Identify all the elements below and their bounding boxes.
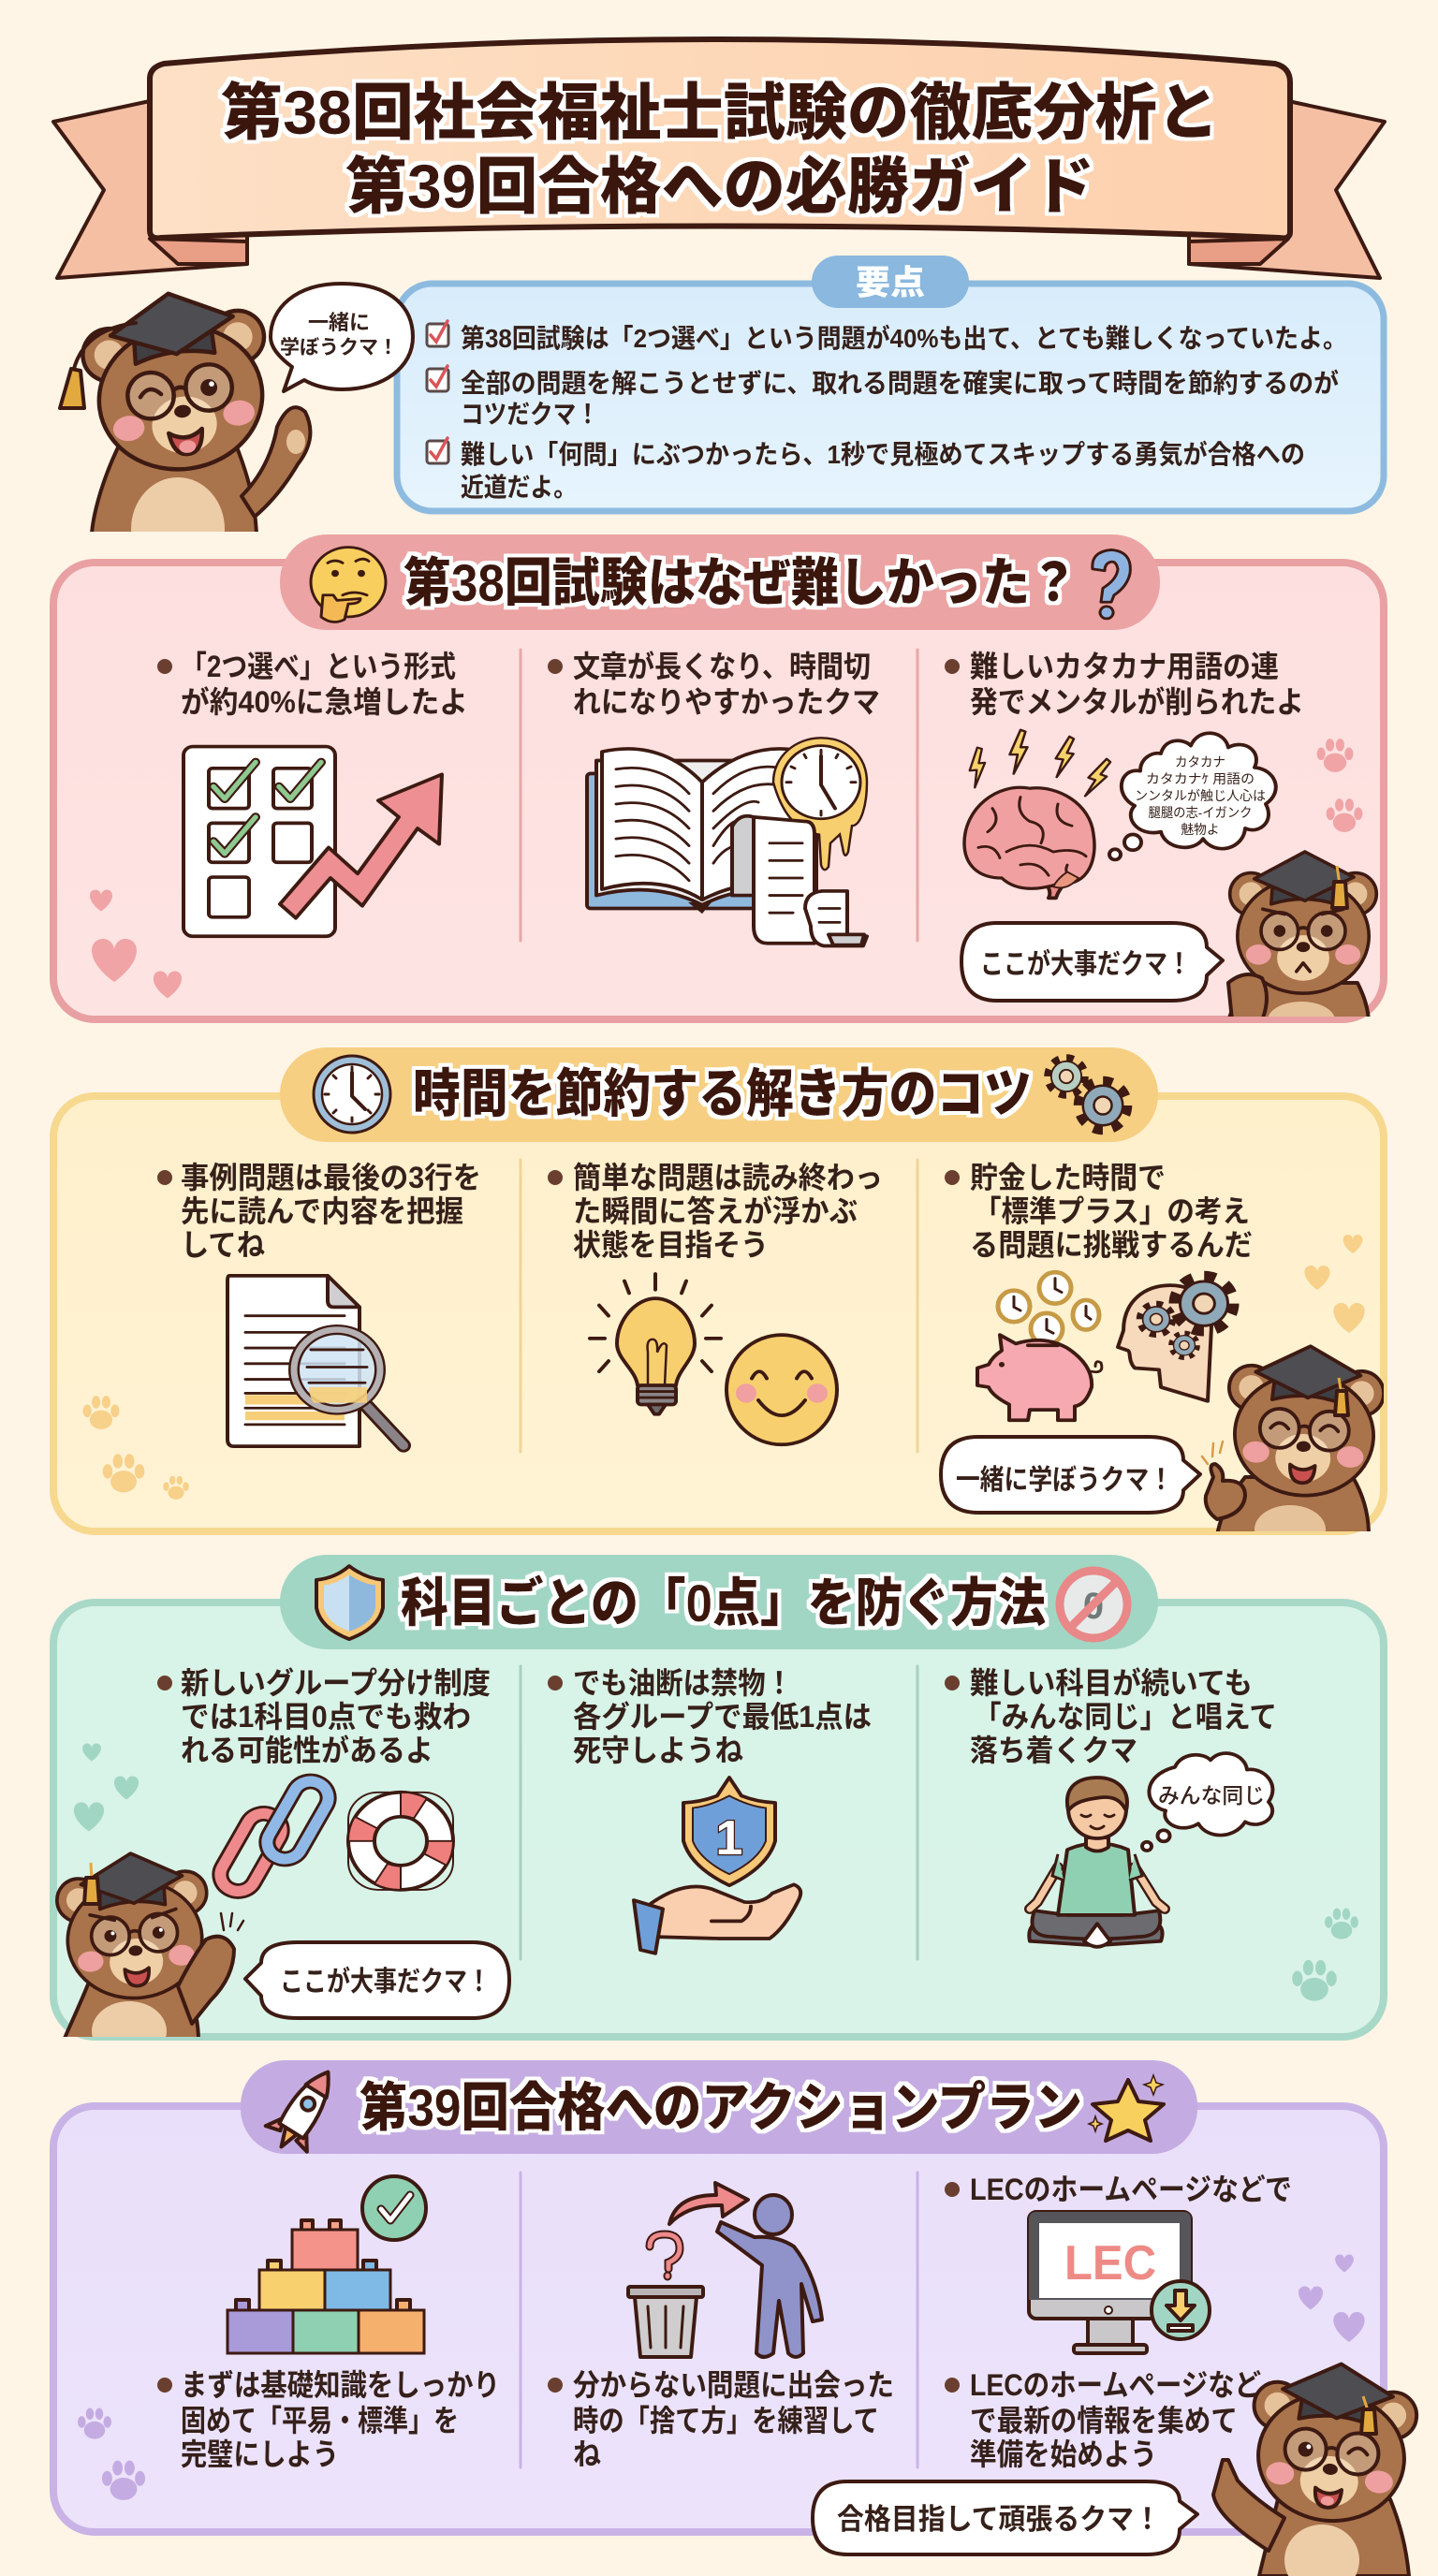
section heading: 科目ごとの「0点」を防ぐ方法 <box>401 1573 1046 1632</box>
ribbon right tail <box>1189 101 1385 278</box>
column text 2: た瞬間に答えが浮かぶ <box>573 1194 858 1228</box>
illustration: smiley face <box>726 1335 837 1444</box>
ribbon left tail <box>53 101 247 278</box>
decorative hearts <box>1304 1235 1365 1333</box>
section heading: 第38回試験はなぜ難しかった？ <box>404 553 1078 612</box>
icon: no zero sign <box>1060 1571 1127 1638</box>
decorative paws <box>78 2408 145 2500</box>
icon: thinking face <box>311 548 386 622</box>
bear mascot pointing <box>1213 2357 1420 2576</box>
column text 1: まずは基礎知識をしっかり <box>181 2368 500 2402</box>
illustration: chain links <box>214 1776 334 1897</box>
bear mascot waving with cap <box>58 292 313 532</box>
column text 2 <box>548 2368 894 2471</box>
column text 3: る問題に挑戦するんだ <box>970 1228 1253 1262</box>
decorative hearts <box>1299 2254 1365 2342</box>
decorative paws <box>83 1396 189 1500</box>
panel: time saving tips <box>53 1047 1387 1554</box>
thought cloud with katakana: カタカナｹ 用語の <box>1146 771 1255 786</box>
column text 3 <box>945 2368 1261 2471</box>
summary item 2: 全部の問題を解こうとせずに、取れる問題を確実に取って時間を節約するのが <box>461 368 1339 398</box>
column text 1: してね <box>181 1228 265 1262</box>
column text 2 <box>548 1161 883 1262</box>
speech bubble: study together <box>941 1437 1200 1513</box>
section heading: 第39回合格へのアクションプラン <box>360 2078 1082 2137</box>
column text 3: 「標準プラス」の考え <box>974 1194 1250 1228</box>
column text 2 <box>548 1666 872 1767</box>
column text 1 <box>157 650 468 719</box>
column text 2: ね <box>573 2437 601 2471</box>
bear mascot happy with thumb up <box>1204 1344 1384 1531</box>
icon: question mark <box>1093 549 1130 619</box>
icon: rocket <box>260 2059 348 2159</box>
summary item 2 <box>427 366 1339 429</box>
illustration: head with gears <box>1118 1279 1230 1401</box>
column text 2: 文章が長くなり、時間切 <box>573 650 871 683</box>
sparkle lines near paw <box>221 1913 243 1930</box>
column text 3 <box>945 650 1304 719</box>
illustration: stacked blocks with check <box>227 2176 426 2353</box>
section heading <box>280 534 1160 630</box>
thought cloud: everyone's the same: みんな同じ <box>1158 1783 1265 1808</box>
summary item 3: 難しい「何問」にぶつかったら、1秒で見極めてスキップする勇気が合格への <box>461 439 1305 469</box>
section heading <box>280 1047 1158 1142</box>
speech bubble: study together: 一緒に <box>308 311 370 334</box>
bear mascot worried <box>1228 852 1376 1039</box>
column text 2: 状態を目指そう <box>573 1228 769 1262</box>
column text 3: 貯金した時間で <box>970 1161 1166 1194</box>
speech bubble: this is important: ここが大事だクマ！ <box>280 1966 491 1998</box>
speech bubble: study together: 一緒に学ぼうクマ！ <box>956 1465 1173 1496</box>
column text 3: LECのホームページなど <box>970 2368 1261 2402</box>
speech bubble: this is important <box>245 1942 509 2018</box>
panel: why the 38th exam was hard <box>53 534 1384 1039</box>
speech bubble: study together: 学ぼうクマ！ <box>280 337 398 359</box>
column text 3: で最新の情報を集めて <box>970 2404 1238 2437</box>
column text 1: が約40%に急増したよ <box>181 685 468 719</box>
column text 2: 簡単な問題は読み終わっ <box>573 1161 883 1194</box>
column text top right: LECのホームページなどで <box>970 2173 1292 2206</box>
summary item 3: 近道だよ。 <box>461 473 577 502</box>
column text 3: 難しい科目が続いても <box>970 1666 1253 1700</box>
illustration: meditating person <box>1029 1778 1165 1947</box>
illustration: monitor with LEC and download <box>1029 2212 1210 2353</box>
illustration: monitor with LEC and download: LEC <box>1064 2236 1156 2291</box>
column text 1: 先に読んで内容を把握 <box>181 1194 463 1228</box>
ribbon main body <box>150 39 1290 238</box>
thought cloud: everyone's the same <box>1142 1753 1272 1851</box>
icon: clock <box>314 1056 390 1133</box>
speech bubble: aim to pass <box>813 2481 1197 2554</box>
column text 2: 時の「捨て方」を練習して <box>573 2404 879 2437</box>
column text 3 <box>945 1666 1277 1767</box>
decorative hearts <box>90 889 182 998</box>
decorative paws <box>1317 739 1362 832</box>
section heading <box>280 1555 1158 1649</box>
summary item 2: コツだクマ！ <box>461 400 599 429</box>
ribbon folds <box>150 239 1288 264</box>
icon: shield <box>316 1566 383 1639</box>
column text 2: 各グループで最低1点は <box>573 1700 872 1734</box>
column dividers <box>521 650 917 2467</box>
title text <box>221 78 1219 221</box>
thought cloud with katakana: ンンタルが触じ人心は <box>1135 788 1266 803</box>
thought cloud with katakana: 腿腿の志-イガンク <box>1148 805 1253 820</box>
column text 1: では1科目0点でも救わ <box>181 1700 471 1734</box>
title text: 第38回社会福祉士試験の徹底分析と <box>221 78 1219 147</box>
illustration: open book, melting clock and scroll <box>587 738 867 946</box>
column text 3: 発でメンタルが削られたよ <box>970 685 1304 719</box>
column text 1: 新しいグループ分け制度 <box>181 1666 491 1700</box>
speech bubble: this is important: ここが大事だクマ！ <box>980 948 1191 980</box>
thought cloud with katakana <box>1109 733 1276 859</box>
column text 1: れる可能性があるよ <box>181 1734 433 1767</box>
column text 1: 固めて「平易・標準」を <box>181 2404 459 2437</box>
column text 3: 難しいカタカナ用語の連 <box>970 650 1279 683</box>
thought cloud with katakana: 魅物よ <box>1181 822 1219 837</box>
column text 2 <box>548 650 880 719</box>
bear mascot waving <box>55 1852 236 2037</box>
speech bubble: this is important <box>961 923 1223 1001</box>
column text 1: 完璧にしよう <box>181 2437 339 2471</box>
summary heading pill <box>812 256 969 308</box>
column text 2: 死守しようね <box>573 1734 743 1767</box>
summary item 3 <box>427 438 1305 502</box>
column text 1: 事例問題は最後の3行を <box>181 1161 481 1194</box>
summary heading pill: 要点 <box>856 263 925 301</box>
illustration: shield number 1 and hand: 1 <box>716 1811 742 1866</box>
column text 3 <box>945 1161 1253 1262</box>
column text 2: でも油断は禁物！ <box>573 1666 793 1700</box>
panel: action plan for the 39th exam <box>53 2059 1384 2532</box>
column text 3: 落ち着くクマ <box>970 1734 1137 1767</box>
column text 3: 準備を始めよう <box>970 2437 1157 2471</box>
illustration: shield number 1 and hand <box>683 1778 775 1885</box>
section heading: 時間を節約する解き方のコツ <box>413 1064 1032 1123</box>
summary item 1: 第38回試験は「2つ選べ」という問題が40%も出て、とても難しくなっていたよ。 <box>461 323 1347 353</box>
column text 1 <box>157 1666 491 1767</box>
icon: star with sparkles <box>1089 2075 1164 2141</box>
decorative paws <box>1292 1908 1358 2001</box>
panel: preventing zero points <box>53 1555 1384 2061</box>
column text 2: れになりやすかったクマ <box>573 685 880 719</box>
icon: gears <box>1049 1060 1125 1128</box>
icon: no zero sign: 0 <box>1083 1586 1104 1627</box>
illustration: light bulb <box>590 1274 721 1414</box>
illustration: checklist and rising arrow <box>183 747 442 936</box>
thought cloud with katakana: カタカナ <box>1175 754 1225 769</box>
title ribbon banner <box>53 39 1385 278</box>
decorative hearts <box>74 1743 139 1831</box>
speech bubble: aim to pass: 合格目指して頑張るクマ！ <box>837 2503 1161 2536</box>
illustration: discard question to trash <box>628 2183 822 2357</box>
illustration: piggy bank with clock coins <box>977 1272 1102 1420</box>
section heading <box>241 2060 1197 2154</box>
column text 1 <box>157 2368 500 2471</box>
speech bubble: study together <box>271 284 413 391</box>
column text 2: 分からない問題に出会った <box>573 2368 894 2402</box>
column text 3: 「みんな同じ」と唱えて <box>974 1700 1277 1734</box>
illustration: open hand <box>634 1884 800 1954</box>
column text 1 <box>157 1161 481 1262</box>
title text: 第39回合格への必勝ガイド <box>345 152 1094 221</box>
illustration: life ring <box>348 1793 453 1890</box>
illustration: document and magnifier <box>227 1276 404 1446</box>
summary panel <box>397 256 1384 511</box>
column text 1: 「2つ選べ」という形式 <box>181 650 456 683</box>
illustration: brain with lightning <box>964 730 1113 898</box>
sparkle lines near thumb <box>1202 1442 1223 1464</box>
